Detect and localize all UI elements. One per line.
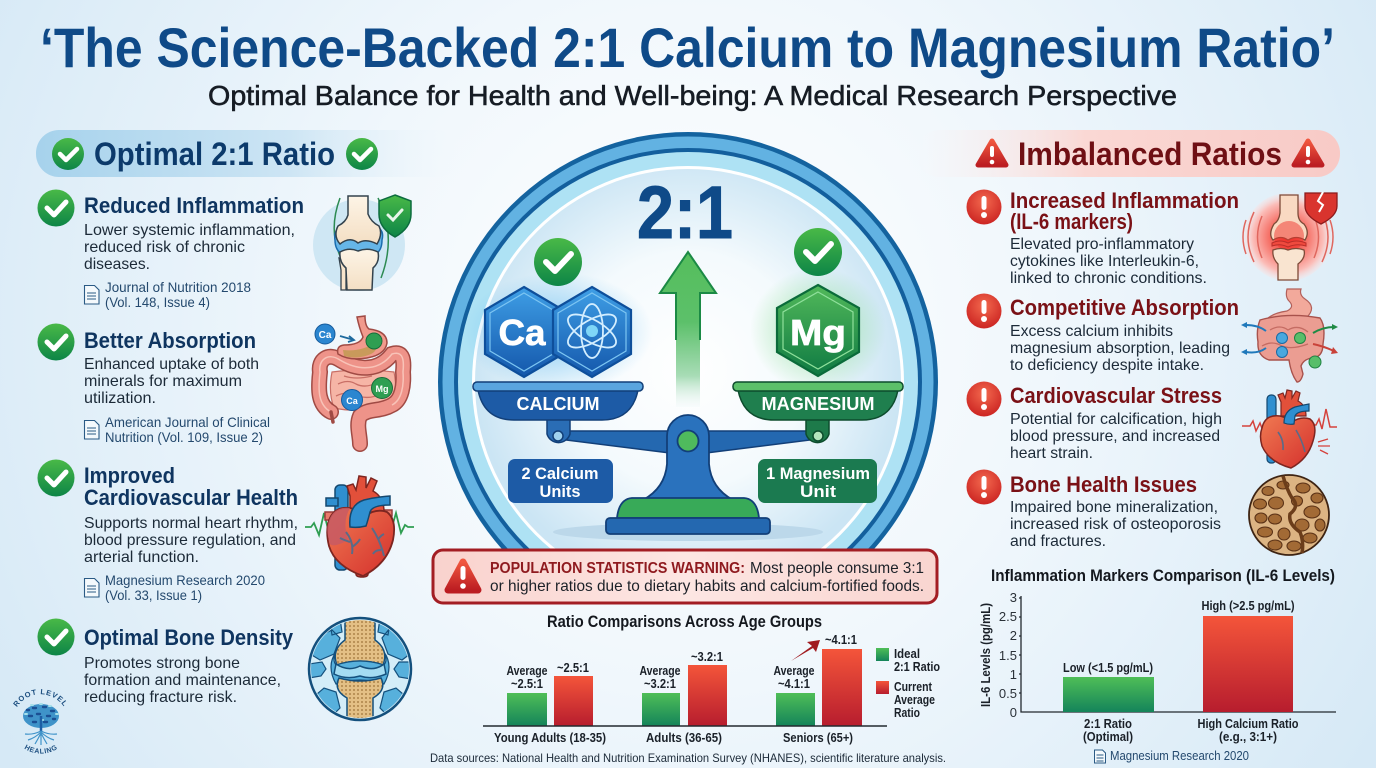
bar: optimal: (Optimal) bbox=[1083, 729, 1133, 744]
benefit: reduced inflammation: (Vol. 148, Issue 4) bbox=[105, 294, 210, 310]
bar: high calcium: High (>2.5 pg/mL) bbox=[1202, 598, 1294, 613]
risk: competitive absorption: to deficiency despite intake. bbox=[1010, 357, 1204, 374]
icon: competitive gut with arrows bbox=[1241, 289, 1338, 382]
bar: high calcium: High Calcium Ratio bbox=[1198, 716, 1299, 731]
icon: stressed heart bbox=[1242, 390, 1337, 468]
y axis ticks: 2.5 bbox=[999, 609, 1017, 624]
panel: imbalanced ratios bbox=[966, 130, 1340, 556]
logo: root level healing: ROOT LEVEL bbox=[13, 689, 66, 707]
y axis ticks bbox=[999, 590, 1017, 720]
y axis ticks: 1.5 bbox=[999, 648, 1017, 663]
right pan bbox=[738, 390, 898, 420]
risk: bone health issues: Impaired bone mineralization, bbox=[1010, 499, 1218, 516]
label: 2 calcium units: Units bbox=[540, 482, 580, 501]
icon: calcium hexagons: Ca bbox=[498, 312, 546, 353]
left pan bbox=[478, 390, 638, 420]
icon: calcium hexagons bbox=[463, 238, 653, 392]
chart: ratio comparisons across age groups: Young Adults (18-35) bbox=[494, 730, 606, 745]
section heading: imbalanced ratios: Imbalanced Ratios bbox=[1018, 136, 1282, 172]
bars: seniors: Average bbox=[774, 663, 814, 678]
ring frame bbox=[438, 132, 938, 548]
icon: healthy knee with shield bbox=[313, 195, 411, 291]
benefit: better absorption: Better Absorption bbox=[84, 328, 256, 353]
risk: cardiovascular stress: heart strain. bbox=[1010, 445, 1093, 462]
benefit: optimal bone density: formation and maintenance, bbox=[84, 672, 281, 689]
risk: bone health issues bbox=[966, 470, 1221, 550]
risk: competitive absorption: magnesium absorption, leading bbox=[1010, 340, 1230, 357]
benefit: improved cardiovascular health: Cardiovascular Health bbox=[84, 485, 298, 510]
risk: increased inflammation: Elevated pro-inflammatory bbox=[1010, 236, 1194, 253]
bar: optimal: Low (<1.5 pg/mL) bbox=[1063, 660, 1153, 675]
risk: cardiovascular stress: Cardiovascular Stress bbox=[1010, 383, 1222, 408]
icon: digestive system with minerals: Ca bbox=[346, 396, 359, 406]
logo: root level healing: HEALING bbox=[24, 744, 57, 754]
y axis ticks: 2 bbox=[1010, 628, 1017, 643]
benefit: better absorption: minerals for maximum bbox=[84, 373, 242, 390]
label: 2 calcium units: 2 Calcium bbox=[522, 464, 598, 483]
benefit: improved cardiovascular health bbox=[38, 460, 298, 603]
risk: cardiovascular stress: Potential for calcification, high bbox=[1010, 411, 1222, 428]
chart: ratio comparisons across age groups: Seniors (65+) bbox=[783, 730, 853, 745]
callout: population statistics warning: or higher ratios due to dietary habits and calcium-fortified foods. bbox=[490, 578, 924, 595]
icon: magnesium hexagon: Mg bbox=[790, 312, 846, 353]
balance scale: MAGNESIUM bbox=[762, 394, 874, 414]
risk: cardiovascular stress: blood pressure, and increased bbox=[1010, 428, 1220, 445]
icon: healthy heart with ECG bbox=[305, 476, 414, 577]
benefit: improved cardiovascular health: arterial function. bbox=[84, 549, 199, 566]
bars: young adults: ~2.5:1 bbox=[557, 660, 589, 675]
callout: population statistics warning: POPULATION STATISTICS WARNING: bbox=[490, 560, 745, 577]
callout: population statistics warning bbox=[433, 550, 937, 603]
benefit: improved cardiovascular health: (Vol. 33, Issue 1) bbox=[105, 587, 202, 603]
icon: digestive system with minerals bbox=[315, 316, 403, 444]
bars: adults bbox=[640, 649, 727, 726]
balance scale bbox=[473, 382, 903, 541]
y axis ticks: 0 bbox=[1010, 705, 1017, 720]
risk: competitive absorption: Excess calcium inhibits bbox=[1010, 323, 1173, 340]
risk: competitive absorption: Competitive Absorption bbox=[1010, 295, 1239, 320]
balance scale: CALCIUM bbox=[516, 394, 600, 414]
ratio label: 2:1 bbox=[637, 171, 733, 254]
legend: Ratio bbox=[894, 705, 920, 720]
legend bbox=[876, 646, 940, 720]
icon: magnesium hexagon bbox=[750, 228, 886, 392]
bar: high calcium bbox=[1198, 598, 1299, 744]
y axis label: IL-6 Levels (pg/mL) bbox=[978, 603, 993, 707]
scale beam bbox=[566, 431, 810, 453]
chart: ratio comparisons across age groups: Ratio Comparisons Across Age Groups bbox=[547, 612, 822, 631]
benefit: optimal bone density: reducing fracture risk. bbox=[84, 689, 237, 706]
bars: adults: ~3.2:1 bbox=[644, 676, 676, 691]
source reference: Magnesium Research 2020 bbox=[1110, 748, 1249, 763]
bars: seniors: ~4.1:1 bbox=[778, 676, 810, 691]
benefit: improved cardiovascular health: Improved bbox=[84, 463, 175, 488]
label: 1 magnesium unit: Unit bbox=[800, 482, 836, 501]
label: 2 calcium units bbox=[508, 459, 613, 503]
label: 1 magnesium unit bbox=[758, 459, 877, 503]
panel: optimal 2:1 ratio bbox=[13, 130, 414, 754]
icon: dense healthy bone bbox=[309, 618, 411, 722]
chart: ratio comparisons across age groups bbox=[483, 612, 940, 745]
risk: bone health issues: increased risk of osteoporosis bbox=[1010, 516, 1221, 533]
icon: osteoporotic bone bbox=[1249, 475, 1329, 555]
risk: bone health issues: and fractures. bbox=[1010, 533, 1106, 550]
risk: increased inflammation: cytokines like Interleukin-6, bbox=[1010, 253, 1199, 270]
bars: young adults bbox=[506, 660, 593, 726]
chart: inflammation markers comparison: Inflammation Markers Comparison (IL-6 Levels) bbox=[991, 566, 1335, 585]
risk: increased inflammation: Increased Inflammation bbox=[1010, 188, 1239, 213]
benefit: improved cardiovascular health: Supports normal heart rhythm, bbox=[84, 515, 298, 532]
section heading: imbalanced ratios bbox=[916, 130, 1340, 177]
risk: increased inflammation: (IL-6 markers) bbox=[1010, 209, 1133, 234]
bars: adults: Average bbox=[640, 663, 680, 678]
benefit: reduced inflammation: Journal of Nutrition 2018 bbox=[105, 279, 251, 295]
risk: increased inflammation bbox=[966, 188, 1239, 287]
risk: cardiovascular stress bbox=[966, 382, 1222, 462]
benefit: reduced inflammation bbox=[38, 190, 304, 310]
benefit: improved cardiovascular health: Magnesium Research 2020 bbox=[105, 572, 265, 588]
benefit: better absorption: Enhanced uptake of both bbox=[84, 356, 259, 373]
legend: Average bbox=[894, 692, 935, 707]
benefit: optimal bone density: Optimal Bone Density bbox=[84, 625, 294, 650]
benefit: reduced inflammation: Lower systemic inflammation, bbox=[84, 222, 295, 239]
benefit: reduced inflammation: reduced risk of chronic bbox=[84, 239, 245, 256]
section heading: optimal ratio bbox=[36, 130, 460, 177]
risk: competitive absorption bbox=[966, 294, 1239, 374]
logo: root level healing bbox=[13, 689, 66, 754]
bar: optimal: 2:1 Ratio bbox=[1084, 716, 1132, 731]
benefit: better absorption bbox=[38, 324, 270, 445]
y axis ticks: 0.5 bbox=[999, 686, 1017, 701]
chart: ratio comparisons across age groups: Adults (36-65) bbox=[646, 730, 722, 745]
benefit: optimal bone density bbox=[38, 618, 294, 706]
icon: digestive system with minerals: Mg bbox=[376, 384, 388, 394]
label: 1 magnesium unit: 1 Magnesium bbox=[766, 464, 870, 483]
arrow: upward green bbox=[660, 252, 716, 407]
benefit: optimal bone density: Promotes strong bone bbox=[84, 655, 240, 672]
chart: inflammation markers comparison bbox=[978, 566, 1336, 763]
section heading: optimal ratio: Optimal 2:1 Ratio bbox=[94, 136, 335, 172]
scale stand bbox=[643, 415, 733, 500]
benefit: better absorption: Nutrition (Vol. 109, Issue 2) bbox=[105, 429, 263, 445]
risk: bone health issues: Bone Health Issues bbox=[1010, 472, 1197, 497]
bars: young adults: ~2.5:1 bbox=[511, 676, 543, 691]
bar: optimal bbox=[1063, 660, 1154, 744]
y axis ticks: 1 bbox=[1010, 667, 1017, 682]
benefit: better absorption: utilization. bbox=[84, 390, 156, 407]
legend: Ideal bbox=[894, 646, 920, 661]
bars: seniors bbox=[774, 632, 862, 726]
callout: population statistics warning: Most people consume 3:1 bbox=[750, 560, 924, 577]
legend: Current bbox=[894, 679, 933, 694]
benefit: improved cardiovascular health: blood pressure regulation, and bbox=[84, 532, 296, 549]
subtitle: Optimal Balance for Health and Well-being: A Medical Research Perspective bbox=[208, 80, 1177, 111]
icon: inflamed knee bbox=[1243, 192, 1337, 281]
icon: warning triangle bbox=[448, 562, 478, 590]
benefit: reduced inflammation: Reduced Inflammation bbox=[84, 193, 304, 218]
bars: young adults: Average bbox=[506, 663, 548, 678]
legend: 2:1 Ratio bbox=[894, 659, 940, 674]
arrow: seniors increase bbox=[791, 640, 820, 661]
left pan hanger bbox=[547, 418, 570, 443]
bars: adults: ~3.2:1 bbox=[691, 649, 723, 664]
bar: high calcium: (e.g., 3:1+) bbox=[1219, 729, 1277, 744]
benefit: better absorption: American Journal of Clinical bbox=[105, 414, 270, 430]
panel: central balance scale bbox=[438, 132, 938, 548]
risk: increased inflammation: linked to chronic conditions. bbox=[1010, 270, 1207, 287]
y axis ticks: 3 bbox=[1010, 590, 1017, 605]
right pan hanger bbox=[806, 418, 829, 443]
benefit: reduced inflammation: diseases. bbox=[84, 256, 150, 273]
bars: seniors: ~4.1:1 bbox=[825, 632, 857, 647]
icon: digestive system with minerals: Ca bbox=[319, 330, 332, 341]
data sources footnote: Data sources: National Health and Nutrition Examination Survey (NHANES), scientific literature analysis. bbox=[430, 751, 946, 765]
